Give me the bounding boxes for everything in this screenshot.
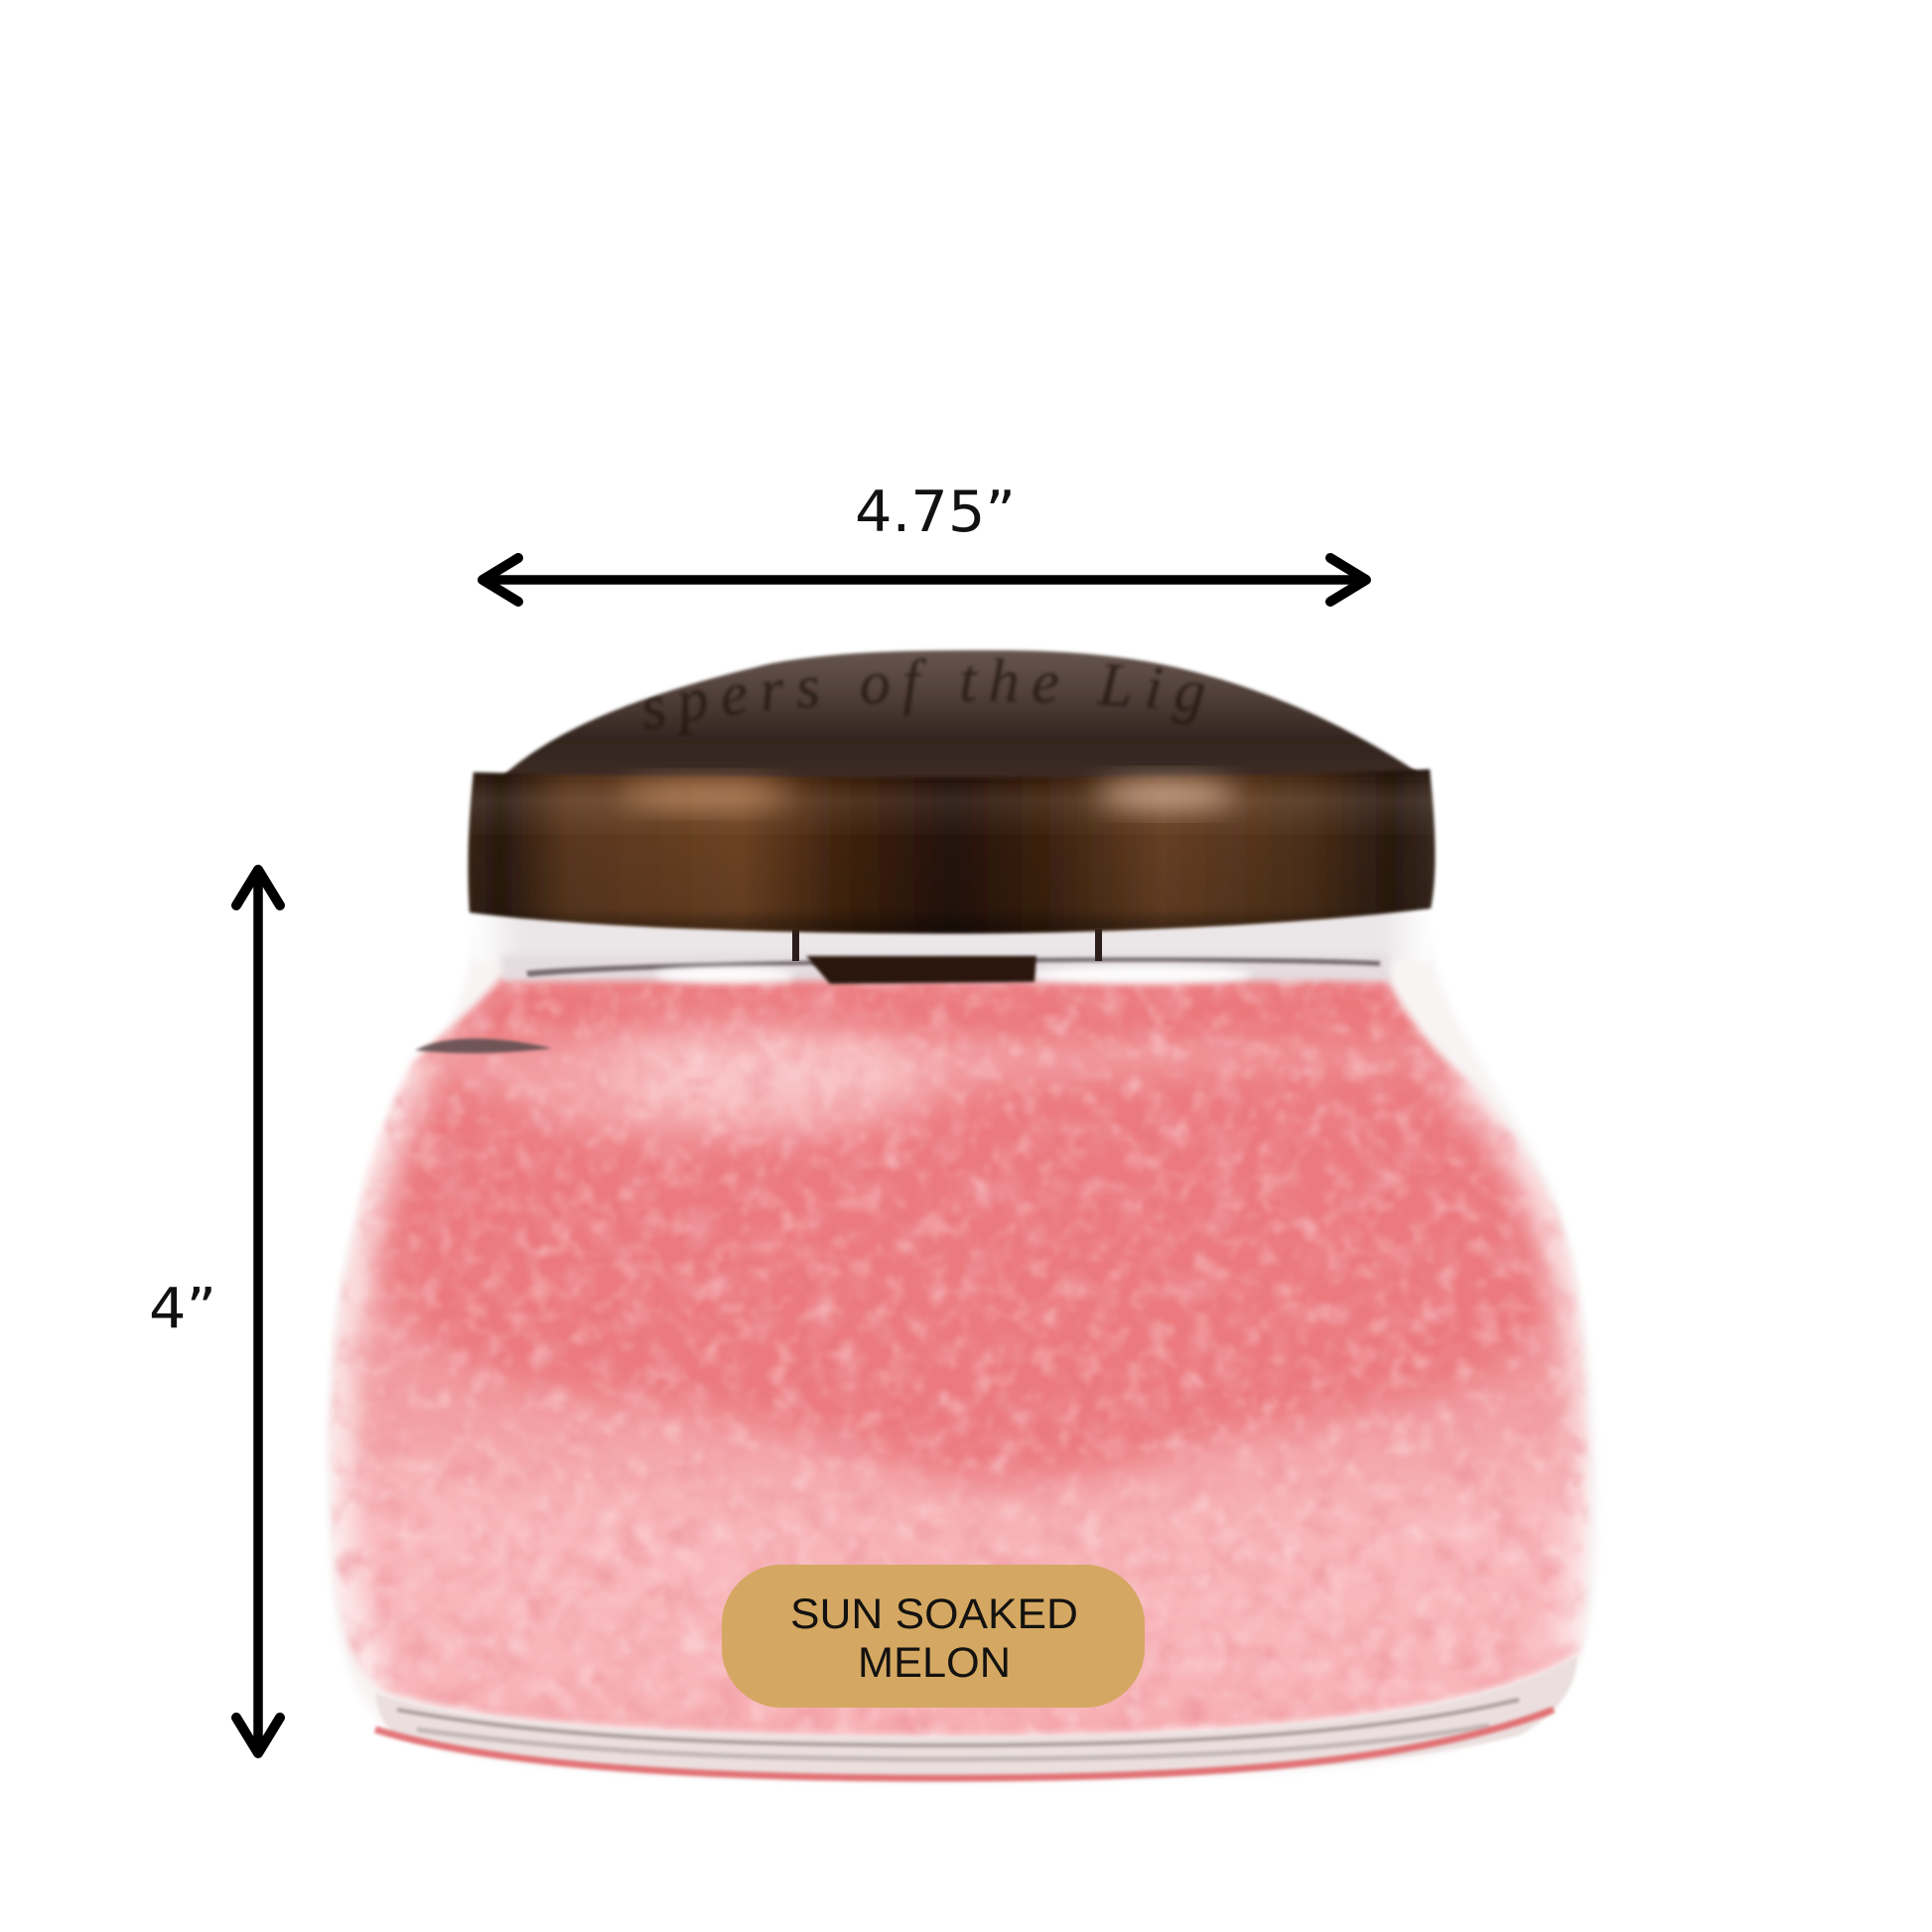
pale wax highlight <box>596 1037 933 1117</box>
product label: SUN SOAKED <box>790 1590 1078 1638</box>
width arrow <box>483 558 1366 602</box>
embossed lid text: spers of the Lig <box>643 656 1205 736</box>
wax mottling <box>318 953 1608 1767</box>
height dimension label: 4” <box>149 1277 216 1341</box>
wax body <box>318 953 1608 1767</box>
glass jar outline <box>328 918 1597 1781</box>
lid dome <box>504 650 1418 794</box>
pale outer wax edges <box>335 1067 1593 1688</box>
height arrow <box>236 870 280 1753</box>
jar base glass <box>375 1656 1577 1780</box>
product label <box>722 1565 1145 1708</box>
rim highlights <box>621 782 789 806</box>
neck glass with wick <box>415 911 1430 1053</box>
product label: MELON <box>858 1639 1011 1687</box>
width dimension label: 4.75” <box>855 480 1016 545</box>
pale lower wax <box>384 1575 1555 1712</box>
dark pink wax band <box>375 1061 1554 1485</box>
lid rim <box>469 769 1435 933</box>
candle jar <box>326 647 1596 1784</box>
neck wax band <box>467 978 1430 1052</box>
lid <box>465 647 1438 936</box>
